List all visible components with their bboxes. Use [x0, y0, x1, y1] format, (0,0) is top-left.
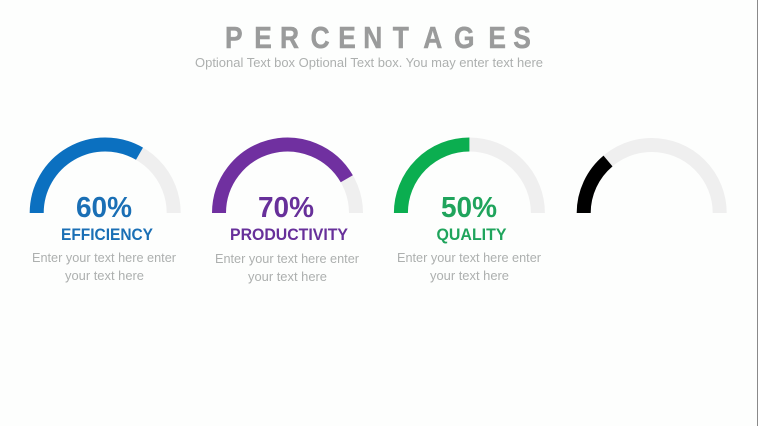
description: productivity: Enter your text here enter: [215, 251, 360, 266]
gauge arc: black: [584, 161, 608, 213]
description: productivity: [215, 251, 360, 284]
label: productivity: PRODUCTIVITY: [230, 225, 349, 244]
description: productivity: your text here: [248, 269, 327, 284]
gauge track: quality: [401, 144, 538, 213]
percentage: 50%: 50%: [441, 192, 497, 224]
label: efficiency: EFFICIENCY: [61, 225, 154, 244]
gauge arc: quality 50%: [401, 144, 469, 213]
label: quality: QUALITY: [436, 225, 507, 244]
panel: efficiency: [32, 144, 177, 283]
description: efficiency: Enter your text here enter: [32, 250, 177, 265]
percentage: 70%: 70%: [258, 192, 314, 224]
description: quality: Enter your text here enter: [397, 250, 542, 265]
subtitle: Optional Text box Optional Text box. You may enter text here: [195, 55, 543, 70]
panel: unlabelled gauge: [584, 145, 720, 213]
percentage: 60%: 60%: [76, 192, 132, 224]
panel: quality: [397, 144, 542, 283]
description: quality: your text here: [430, 268, 509, 283]
gauge track: unlabelled: [584, 145, 720, 213]
description: efficiency: your text here: [65, 268, 144, 283]
gauge arc: productivity 70%: [219, 145, 347, 213]
gauge track: productivity: [219, 145, 356, 213]
description: efficiency: [32, 250, 177, 283]
title: PERCENTAGES: [225, 21, 531, 56]
gauge track: efficiency: [37, 144, 174, 213]
description: quality: [397, 250, 542, 283]
panel: productivity: [215, 145, 360, 284]
gauge arc: efficiency 60%: [37, 144, 140, 213]
